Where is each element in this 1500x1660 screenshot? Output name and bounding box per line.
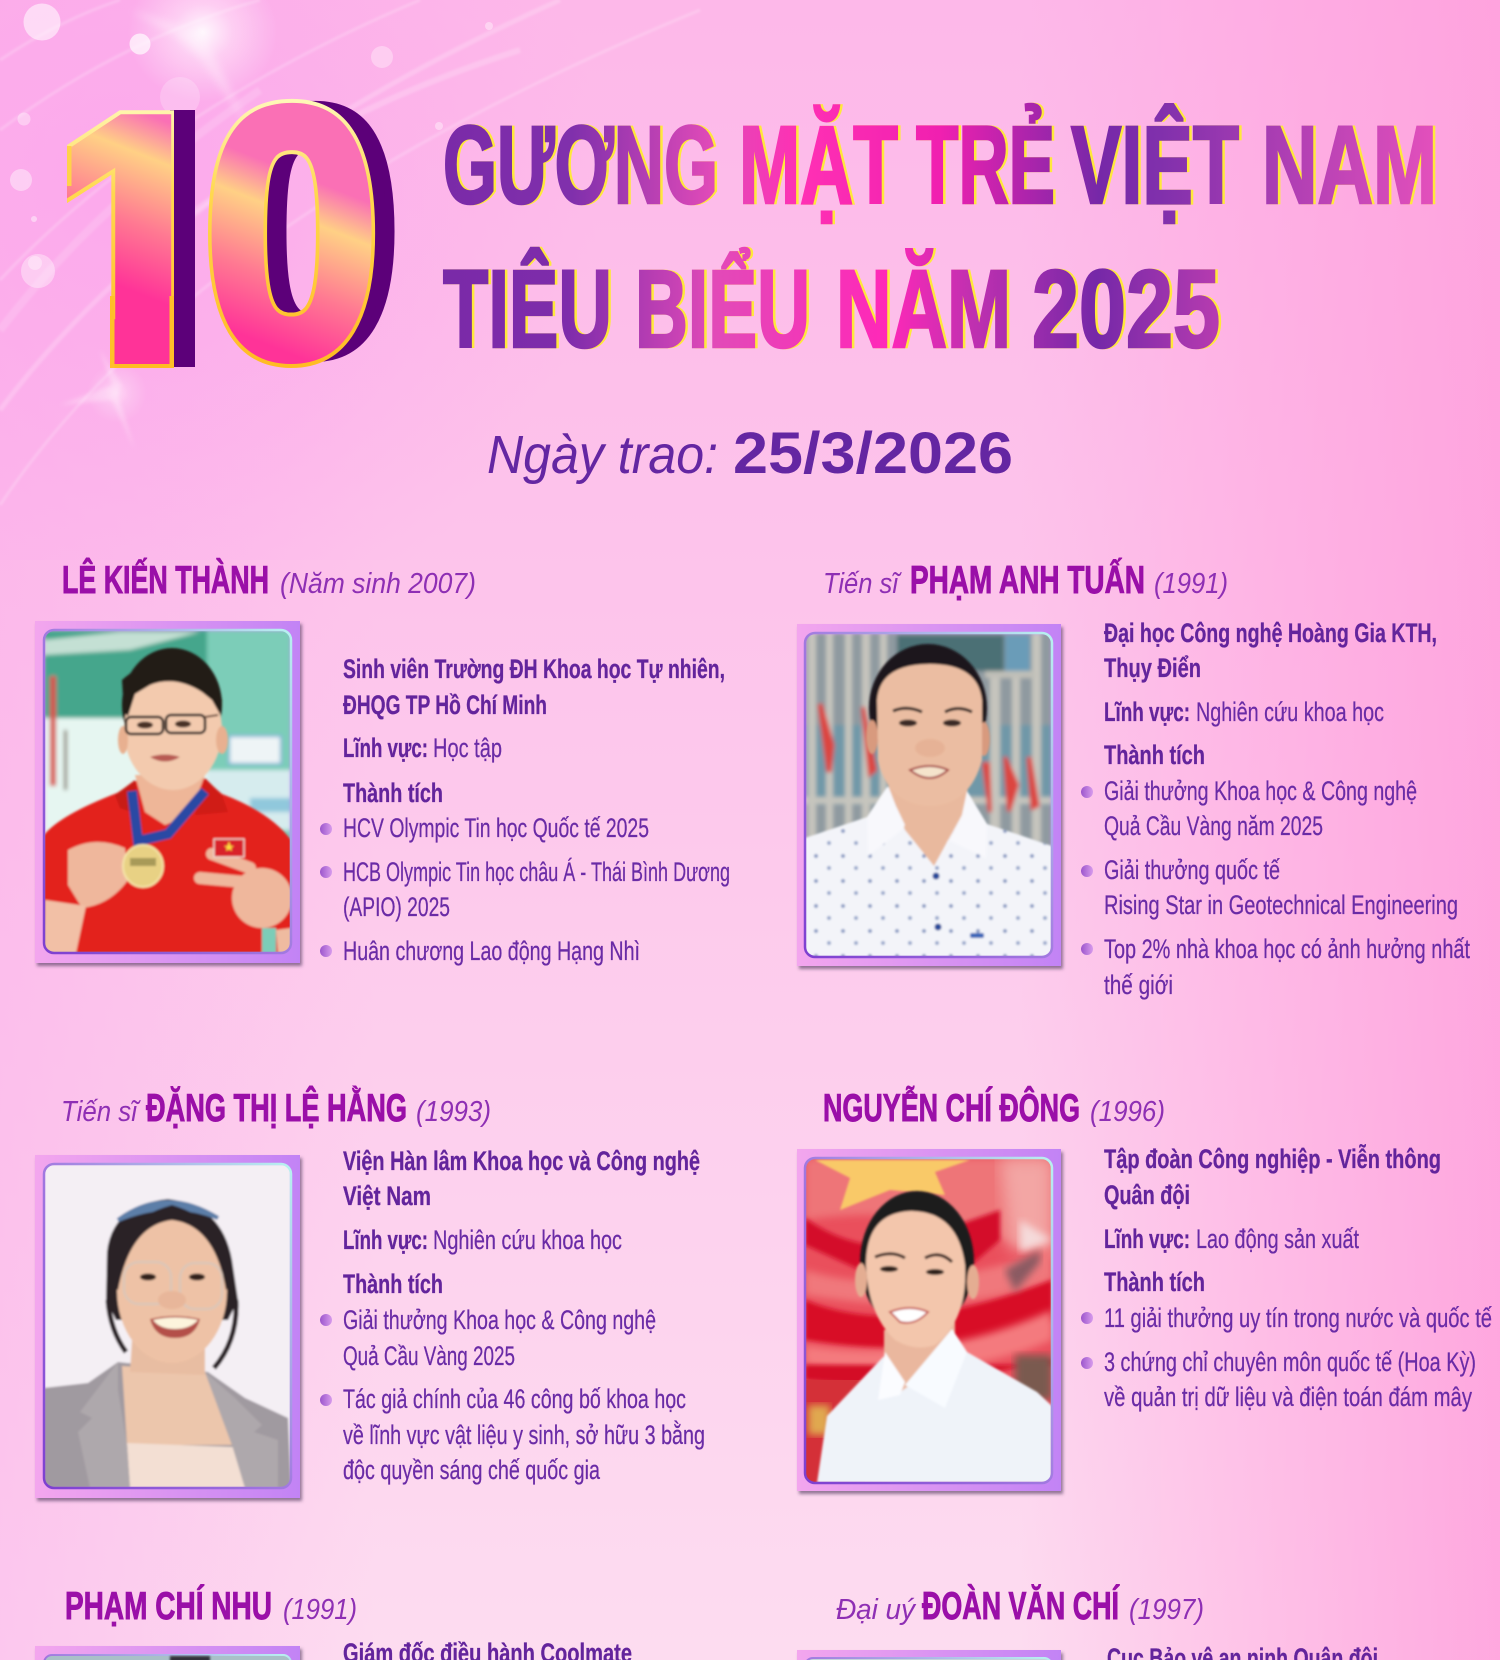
big number 10: 1 [40,44,230,434]
panel: Phạm Anh Tuấn [797,558,1470,1000]
title: BIỂU [638,248,812,371]
big number 10: 1 [40,44,230,434]
profile text: Lĩnh vực: [343,733,428,763]
profile text: Quân đội [1104,1180,1190,1210]
panel: Lê Kiến Thành [35,558,730,966]
title: VIỆT [1074,104,1242,227]
title: MẶT [739,104,898,227]
name heading: NGUYỄN CHÍ ĐÔNG [823,1085,1080,1130]
profile text: Lĩnh vực: [1104,1224,1190,1254]
name heading: Tiến sĩ [61,1096,141,1128]
photo frame [35,621,300,963]
title: NĂM [836,248,1011,371]
panel: Đặng Thị Lệ Hằng [35,1086,705,1498]
big number 10: 0 [209,33,387,430]
profile text: thế giới [1104,970,1173,1000]
profile text: độc quyền sáng chế quốc gia [343,1455,601,1485]
title: TRẺ [918,104,1058,227]
photo frame [35,1155,300,1498]
title: GƯƠNG [443,104,718,227]
name heading: PHẠM ANH TUẤN [910,558,1145,602]
name heading: (Năm sinh 2007) [280,568,476,600]
profile text: Thành tích [343,778,443,808]
profile text: HCB Olympic Tin học châu Á - Thái Bình Dương [343,857,730,887]
profile text: HCV Olympic Tin học Quốc tế 2025 [343,813,649,843]
profile text [1081,618,1470,1000]
profile text: Tác giả chính của 46 công bố khoa học [343,1384,686,1414]
photo frame [797,1650,1061,1660]
title: 2025 [1034,248,1222,371]
decorative sparkles and bubbles [0,0,700,505]
name heading: LÊ KIẾN THÀNH [62,558,269,602]
profile text: Thành tích [343,1269,443,1299]
title: TRẺ [916,104,1055,227]
title: GƯƠNG [446,104,720,227]
award date: 25/3/2026 [733,421,1013,486]
panel: Phạm Chí Nhu [35,1584,632,1660]
profile text [1081,1143,1492,1412]
profile text: Lao động sản xuất [1196,1224,1359,1254]
big number 10: 0 [203,35,381,432]
profile text: Việt Nam [343,1181,431,1211]
title: BIỂU [635,248,810,371]
name heading: PHẠM CHÍ NHU [65,1584,272,1628]
name heading: (1996) [1090,1096,1165,1128]
panel: Nguyễn Chí Đông [797,1085,1492,1491]
profile text: Giải thưởng quốc tế [1104,855,1280,885]
name heading: ĐOÀN VĂN CHÍ [922,1584,1120,1628]
panel: Đoàn Văn Chí [797,1584,1378,1660]
profile text: (APIO) 2025 [343,892,450,922]
award date: Ngày trao: [487,425,718,485]
big number 10 [67,98,395,368]
name heading: Đại uý [836,1594,916,1626]
profile text: Thành tích [1104,1267,1205,1297]
photo frame [797,624,1061,966]
big number 10: 0 [203,35,381,432]
photo frame [35,1646,300,1660]
name heading: (1991) [1154,568,1228,600]
award date [487,421,1013,486]
profile text: ĐHQG TP Hồ Chí Minh [343,690,547,720]
profile text: Lĩnh vực: [1104,697,1190,727]
title: TIÊU [446,248,614,371]
profile text: Sinh viên Trường ĐH Khoa học Tự nhiên, [343,654,725,684]
profile text: Huân chương Lao động Hạng Nhì [343,936,640,966]
title: NĂM [838,248,1014,371]
big number 10: 0 [221,33,399,430]
name heading: (1991) [283,1594,357,1626]
profile text: Thành tích [1104,740,1205,770]
profile text: Thụy Điển [1104,653,1201,683]
title: 2025 [1032,248,1220,371]
name heading: (1993) [416,1096,491,1128]
title: MẶT [742,104,900,227]
title [443,104,1440,371]
profile text: Lĩnh vực: [343,1225,428,1255]
profile text: Giải thưởng Khoa học & Công nghệ [343,1305,656,1335]
name heading: ĐẶNG THỊ LỆ HẰNG [146,1086,407,1130]
big number 10: 0 [215,33,393,430]
title: VIỆT [1071,104,1239,227]
profile text: Nghiên cứu khoa học [433,1225,622,1255]
title: TIÊU [443,248,612,371]
profile text: về lĩnh vực vật liệu y sinh, sở hữu 3 bằng [343,1419,705,1450]
profile text: Học tập [433,733,502,763]
profile text: Quả Cầu Vàng 2025 [343,1341,515,1371]
name heading: Tiến sĩ [823,568,902,600]
profile text: Quả Cầu Vàng năm 2025 [1104,811,1323,841]
profile text [320,654,730,966]
profile text: Viện Hàn lâm Khoa học và Công nghệ [343,1146,700,1176]
profile text: Nghiên cứu khoa học [1196,697,1384,727]
profile text [320,1146,705,1485]
photo frame [797,1149,1061,1491]
name heading: (1997) [1129,1594,1204,1626]
big number 10: 0 [226,33,404,430]
